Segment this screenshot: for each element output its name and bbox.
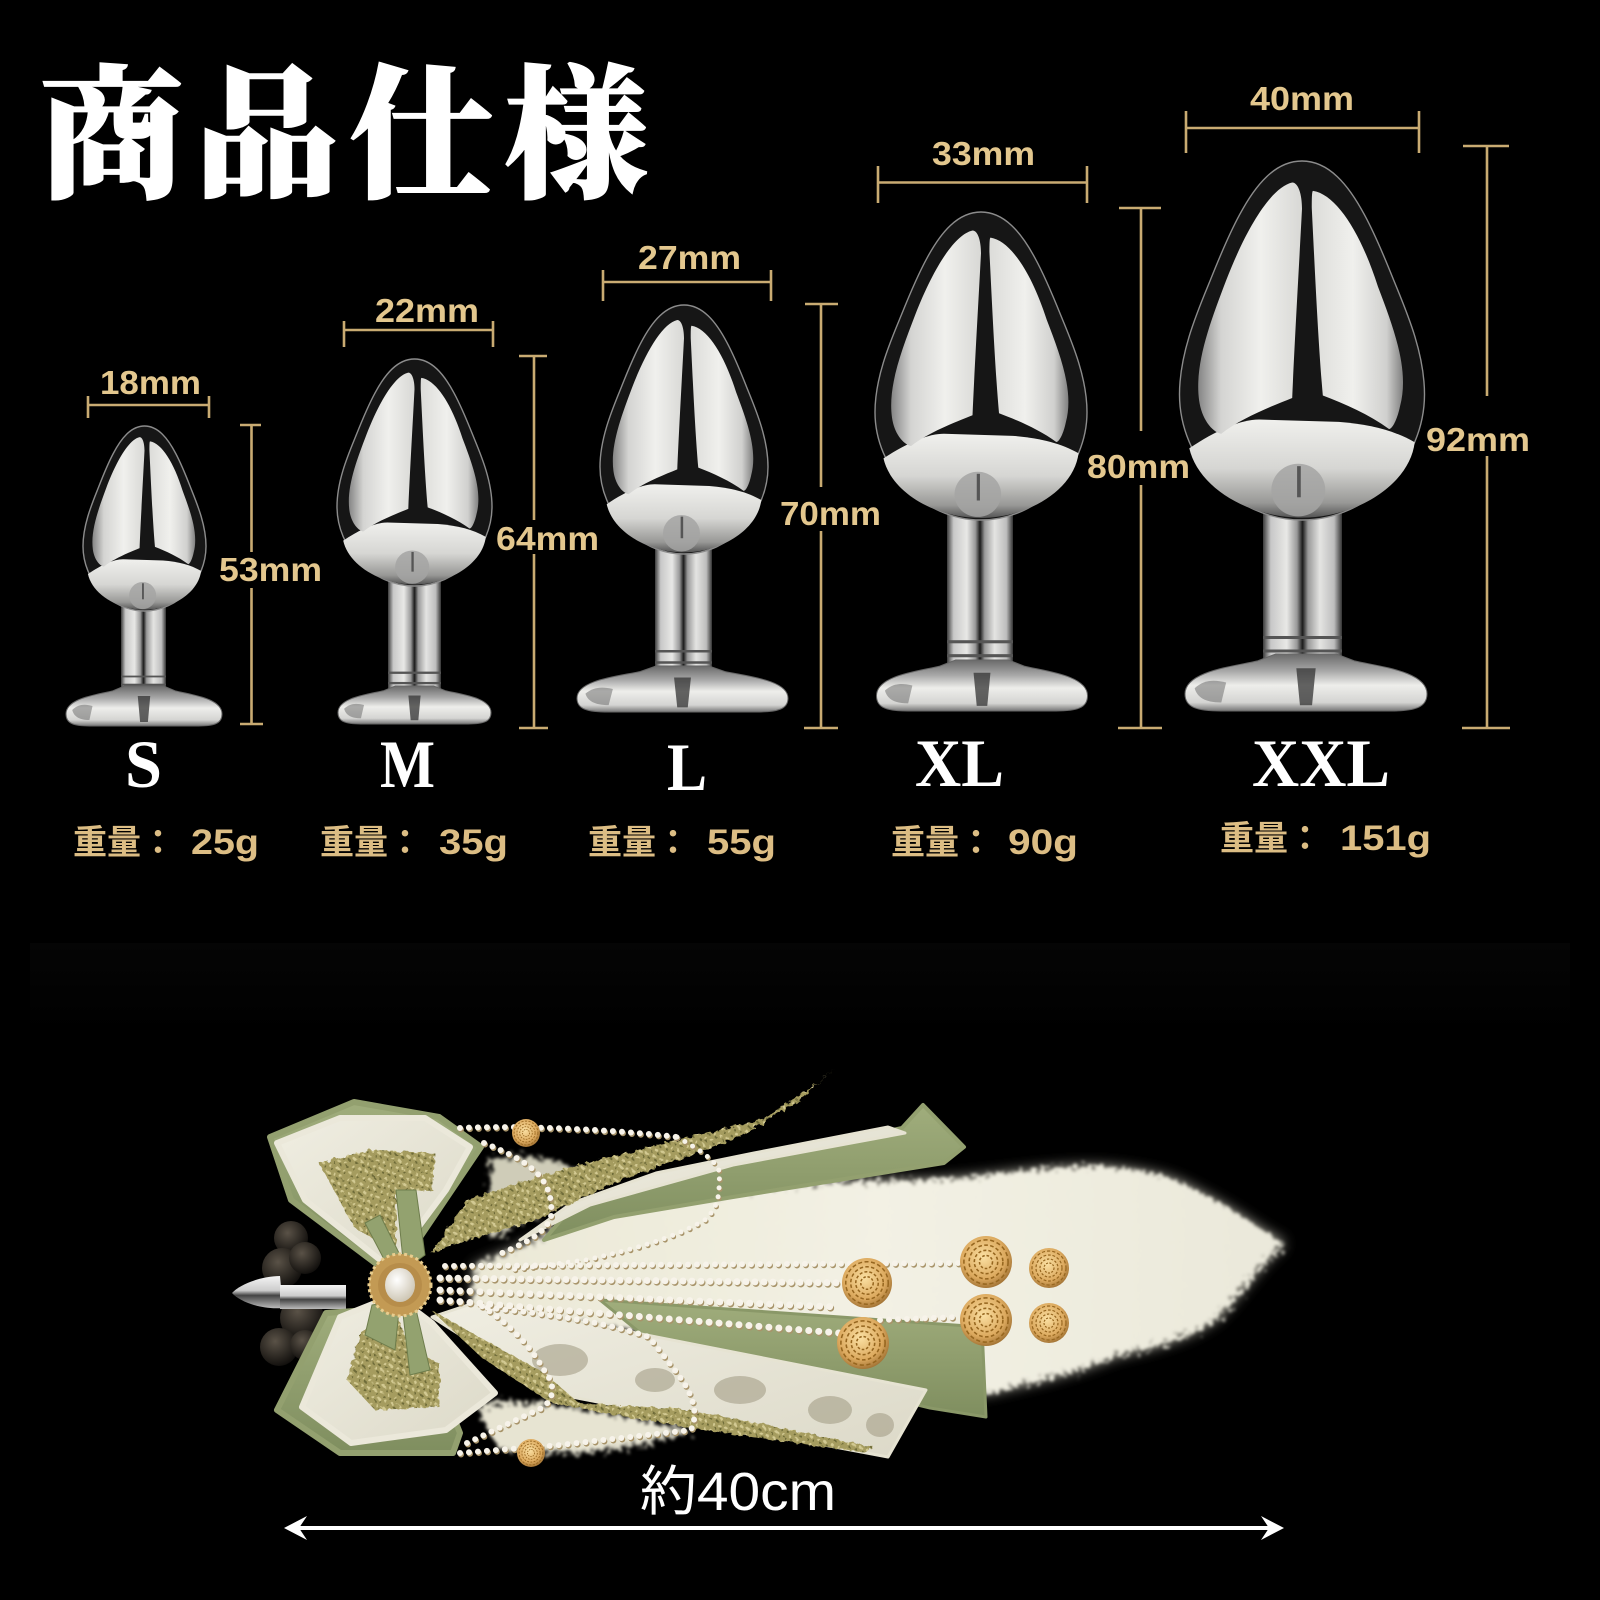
L weight: 重量：: [588, 824, 690, 862]
XXL height dimension: 92mm: [1426, 421, 1530, 458]
XL size label: XL: [915, 725, 1004, 801]
L plug illustration: [577, 305, 788, 712]
upper lace ribbon: [431, 1068, 835, 1253]
S plug illustration: [66, 426, 222, 726]
lower lace ribbon: [431, 1310, 874, 1453]
L width dimension: [603, 239, 771, 301]
L weight: 55g: [707, 823, 776, 862]
XXL width dimension: [1186, 80, 1419, 153]
S width dimension: 18mm: [100, 364, 201, 401]
XXL plug illustration: [1180, 161, 1427, 711]
XXL weight: 重量：: [1220, 820, 1322, 858]
icon: small silver plug: [232, 1276, 346, 1309]
M weight: 35g: [439, 823, 508, 862]
size L product: [577, 239, 881, 862]
icon: dark jewel cluster: [260, 1221, 324, 1366]
size S product: [66, 364, 322, 862]
XL weight: 90g: [1008, 823, 1078, 862]
pearl brooch: [369, 1254, 431, 1316]
M height dimension: 64mm: [496, 520, 599, 557]
S width dimension: [88, 364, 209, 418]
S weight: 重量：: [73, 824, 175, 862]
M width dimension: 22mm: [375, 292, 479, 329]
L height dimension: [780, 304, 881, 728]
gold filigree bells: [512, 1119, 1069, 1467]
size XL product: [875, 135, 1190, 862]
tail accessory photo illustration: [232, 1068, 1285, 1467]
lower ivory ribbon: [432, 1303, 926, 1457]
M plug illustration: [337, 359, 492, 724]
upper bow loop: [270, 1102, 481, 1267]
arrow: overall length: [284, 1516, 1284, 1540]
lower bow loop: [277, 1295, 495, 1453]
XXL width dimension: 40mm: [1250, 80, 1354, 117]
upper green ribbon: [544, 1105, 964, 1240]
M height dimension: [496, 356, 599, 728]
size M product: [320, 292, 599, 862]
upper ivory ribbon: [520, 1127, 905, 1240]
XL width dimension: 33mm: [932, 135, 1035, 172]
XXL size label: XXL: [1252, 725, 1390, 801]
L size label: L: [667, 729, 707, 805]
L height dimension: 70mm: [780, 495, 881, 532]
bow knot ribbons: [365, 1190, 430, 1375]
pearl necklace strands: [440, 1127, 961, 1454]
lower photo panel: [30, 943, 1570, 1033]
M weight: 重量：: [320, 824, 422, 862]
size XXL product: [1180, 80, 1530, 858]
length label: 約40cm: [640, 1462, 836, 1522]
S height dimension: [219, 425, 322, 724]
XL width dimension: [878, 135, 1087, 203]
XXL height dimension: [1426, 146, 1530, 728]
title: 商品仕様: [40, 21, 648, 228]
lower green ribbon: [600, 1300, 986, 1417]
L width dimension: 27mm: [638, 239, 741, 276]
fur tail: [474, 1156, 1285, 1454]
M size label: M: [380, 726, 435, 802]
XL height dimension: 80mm: [1087, 448, 1190, 485]
XXL weight: 151g: [1340, 819, 1431, 858]
S weight: 25g: [191, 823, 259, 862]
S size label: S: [125, 726, 162, 802]
XL height dimension: [1087, 208, 1190, 728]
M width dimension: [344, 292, 493, 347]
S height dimension: 53mm: [219, 551, 322, 588]
XL weight: 重量：: [891, 824, 993, 862]
XL plug illustration: [875, 212, 1088, 711]
